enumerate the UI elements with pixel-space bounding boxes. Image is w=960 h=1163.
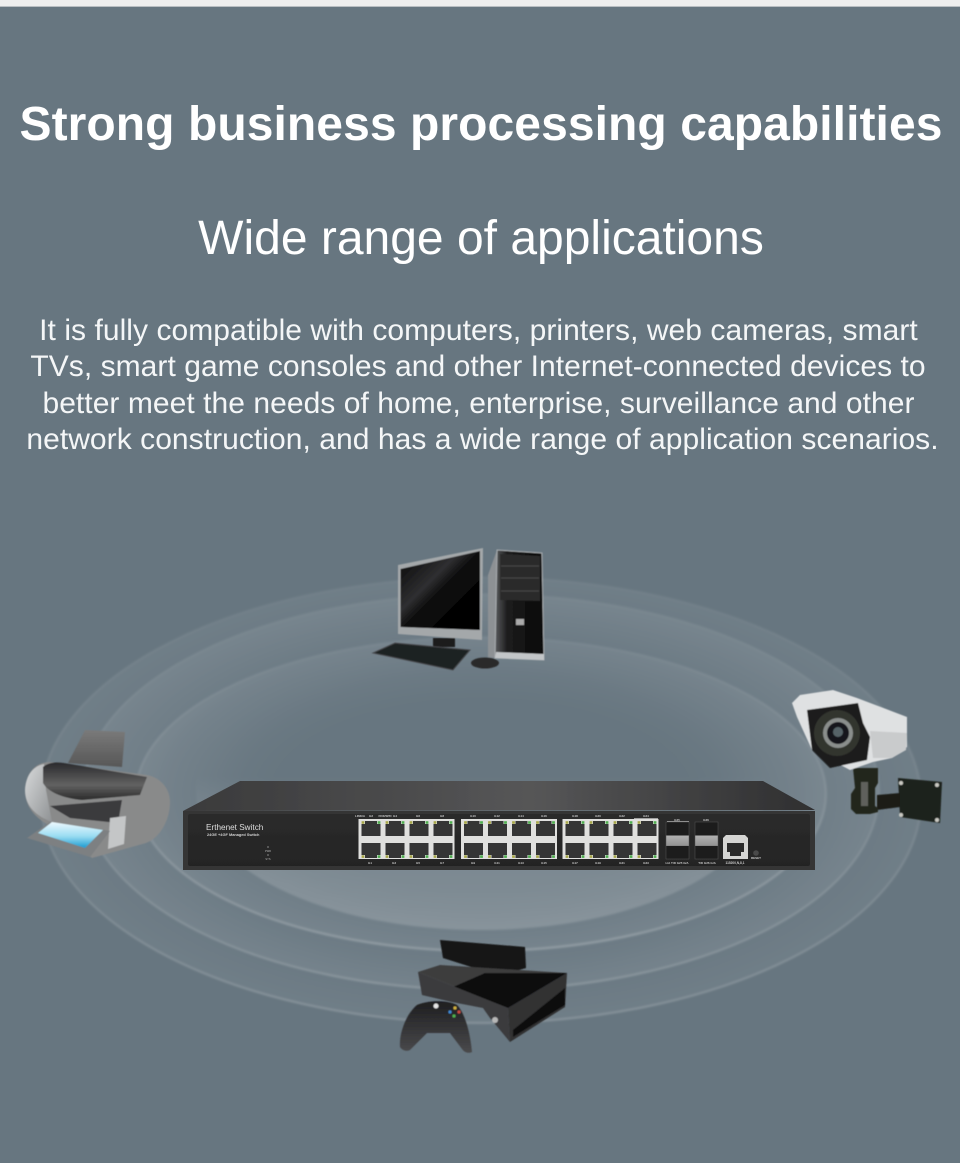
port labels: G9 xyxy=(471,861,475,865)
lens face xyxy=(807,703,870,768)
description text xyxy=(26,314,939,456)
wall bracket xyxy=(851,768,942,823)
port labels: G7 xyxy=(440,861,444,865)
reset button: RESET xyxy=(751,856,761,860)
front face xyxy=(183,811,815,870)
status LEDs: SYS xyxy=(265,857,271,861)
port labels: L/A T/D G25 G/A xyxy=(665,861,689,865)
description text: network construction, and has a wide range of application scenarios. xyxy=(26,423,939,456)
port labels: G2 xyxy=(369,814,373,818)
device: game console xyxy=(400,940,567,1053)
port labels: G17 xyxy=(572,861,578,865)
subtitle: Wide range of applications xyxy=(198,212,764,264)
device: desktop computer xyxy=(373,548,544,670)
port labels xyxy=(355,814,717,865)
mouse xyxy=(471,658,499,668)
status LEDs: PWR xyxy=(265,849,271,853)
brand label xyxy=(206,823,264,837)
port labels: G26 xyxy=(703,818,709,822)
port labels: LINK/A xyxy=(355,814,366,818)
device: security camera xyxy=(792,690,942,823)
port labels: G4 xyxy=(393,814,397,818)
tower xyxy=(488,550,544,660)
port labels: G15 xyxy=(541,861,547,865)
port labels: G24 xyxy=(643,814,649,818)
port labels: G12 xyxy=(494,814,500,818)
signal rings around the switch xyxy=(41,577,921,1023)
port labels: FDX/SPD xyxy=(378,814,392,818)
port labels: T/D G26 G/A xyxy=(698,861,717,865)
body xyxy=(25,762,170,858)
status LEDs xyxy=(265,846,271,861)
port labels: G25 xyxy=(674,818,680,822)
port labels: G19 xyxy=(595,861,601,865)
port labels: G8 xyxy=(440,814,444,818)
keyboard xyxy=(373,643,470,670)
device: printer xyxy=(25,730,170,858)
brand label: 24GE +4GF Managed Switch xyxy=(207,832,260,837)
paper tray xyxy=(27,822,110,857)
title: Strong business processing capabilities xyxy=(20,98,942,150)
console top xyxy=(418,965,567,1008)
port labels: G5 xyxy=(416,861,420,865)
description text: TVs, smart game consoles and other Internet-connected devices to xyxy=(30,350,926,383)
port labels: G11 xyxy=(494,861,500,865)
port labels: G10 xyxy=(470,814,476,818)
monitor xyxy=(398,548,483,647)
port labels: G14 xyxy=(518,814,524,818)
port labels: G20 xyxy=(595,814,601,818)
console port: 115200,N,8,1 xyxy=(726,861,745,865)
port labels: G13 xyxy=(518,861,524,865)
port labels: G22 xyxy=(619,814,625,818)
network switch xyxy=(183,781,815,870)
brand label: Erthenet Switch xyxy=(206,823,264,832)
console port xyxy=(723,835,748,865)
sensor bar xyxy=(440,940,526,980)
reset button xyxy=(751,850,761,860)
port labels: G21 xyxy=(619,861,625,865)
port labels: G6 xyxy=(416,814,420,818)
housing xyxy=(792,690,907,770)
port labels: G23 xyxy=(643,861,649,865)
port labels: G3 xyxy=(392,861,396,865)
RJ45 ports xyxy=(358,819,658,859)
description text: better meet the needs of home, enterprise, surveillance and other xyxy=(42,386,915,420)
top light strip xyxy=(0,0,960,7)
controller xyxy=(400,1001,472,1053)
top face xyxy=(183,781,815,811)
description text: It is fully compatible with computers, printers, web cameras, smart xyxy=(39,314,918,347)
port labels: G1 xyxy=(368,861,372,865)
port labels: G16 xyxy=(541,814,547,818)
SFP slots xyxy=(666,822,718,859)
port labels: G18 xyxy=(572,814,578,818)
paper support xyxy=(68,730,125,767)
console front xyxy=(418,972,510,1042)
